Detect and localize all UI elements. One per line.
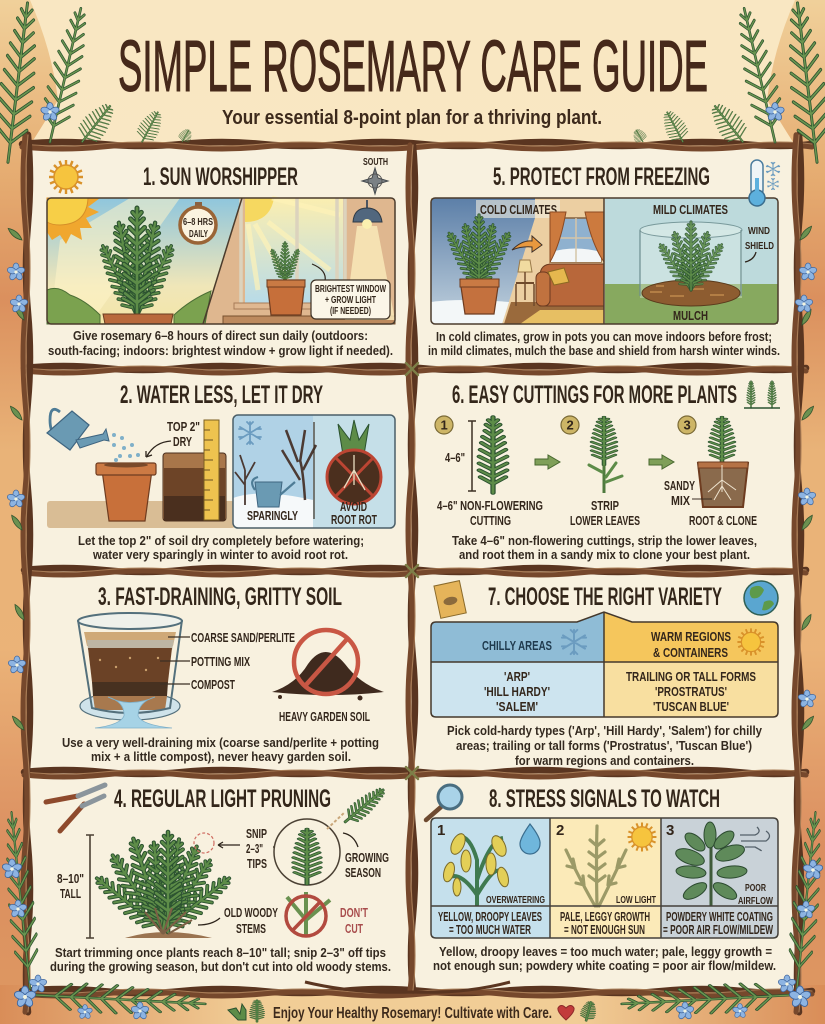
bush — [91, 832, 235, 938]
pot — [96, 462, 156, 521]
detail circle — [274, 784, 388, 885]
wind shield label: SHIELD — [745, 240, 774, 252]
snip label: TIPS — [247, 856, 267, 871]
signal captions: = NOT ENOUGH SUN — [564, 923, 645, 937]
mild label: MILD CLIMATES — [653, 202, 728, 217]
step 3: MIX — [671, 493, 690, 508]
growing season: GROWING — [345, 850, 389, 865]
wind shield label — [745, 225, 774, 262]
panel: 2 water less — [47, 381, 395, 562]
heading 2: 2. WATER LESS, LET IT DRY — [120, 381, 323, 409]
callout — [311, 264, 390, 319]
body 7: areas; trailing or tall forms ('Prostratus', 'Tuscan Blue') — [456, 738, 752, 753]
icon: herbs — [228, 1000, 264, 1022]
step 2: STRIP — [591, 498, 619, 513]
arrow — [535, 455, 560, 469]
signal table — [431, 818, 778, 938]
step 1 — [435, 416, 543, 528]
corner sprigs: bottom right — [622, 812, 825, 1020]
heading 1: 1. SUN WORSHIPPER — [143, 163, 298, 191]
wind shield label: WIND — [748, 225, 770, 237]
body 6: Take 4–6" non-flowering cuttings, strip the lower leaves, — [452, 533, 757, 548]
old woody label: STEMS — [236, 921, 266, 936]
signal captions: PALE, LEGGY GROWTH — [560, 910, 650, 924]
body 4 — [50, 945, 391, 974]
corner sprigs: bottom left — [0, 812, 205, 1020]
snip label: 2–3" — [246, 841, 263, 856]
mulch label: MULCH — [673, 308, 708, 323]
table surface — [47, 501, 235, 528]
dry label — [146, 419, 200, 457]
warm column: 'PROSTRATUS' — [655, 684, 727, 699]
no garden soil sign: HEAVY GARDEN SOIL — [279, 709, 370, 724]
body 6: and root them in a sandy mix to clone your best plant. — [459, 547, 750, 562]
root rot label — [331, 499, 377, 527]
signal 1 — [437, 822, 545, 906]
warm column: & CONTAINERS — [653, 645, 728, 660]
cold plant — [443, 215, 515, 314]
body 8: Yellow, droopy leaves = too much water; pale, leggy growth = — [439, 944, 772, 959]
layer labels — [160, 630, 295, 692]
icon: sun — [49, 160, 83, 194]
panel: 4 pruning — [46, 784, 391, 974]
panel: 8 stress signals — [426, 785, 778, 973]
signal captions: YELLOW, DROOPY LEAVES — [438, 910, 542, 924]
plant — [94, 208, 180, 320]
subtitle: Your essential 8-point plan for a thriving plant. — [222, 107, 602, 129]
panel: 5 protect from freezing — [428, 160, 780, 358]
body 3: mix + a little compost), never heavy garden soil. — [91, 749, 351, 764]
warm column — [626, 628, 765, 714]
chilly column: CHILLY AREAS — [482, 638, 552, 653]
body 1: Give rosemary 6–8 hours of direct sun daily (outdoors: — [73, 328, 368, 343]
signal 1: 1 — [437, 822, 445, 839]
height marker: TALL — [60, 886, 81, 901]
step 1: CUTTING — [470, 513, 511, 528]
chilly column: 'SALEM' — [496, 699, 538, 714]
heading 4: 4. REGULAR LIGHT PRUNING — [114, 785, 331, 813]
step 2 — [561, 416, 640, 528]
icon: globe — [744, 581, 778, 615]
illustration: climates — [431, 198, 778, 324]
step 3: 3 — [684, 418, 691, 432]
step 3 — [664, 416, 757, 528]
dry label: TOP 2" — [167, 419, 200, 434]
layer labels: POTTING MIX — [191, 654, 250, 669]
footer — [228, 1000, 598, 1023]
footer text: Enjoy Your Healthy Rosemary! Cultivate with Care. — [273, 1005, 552, 1022]
icon: compass: SOUTH — [363, 156, 388, 168]
signal 3: AIRFLOW — [738, 895, 773, 907]
step 3: SANDY — [664, 478, 695, 493]
body 1: south-facing; indoors: brightest window + grow light if needed). — [48, 343, 393, 358]
illustration: sun and window — [47, 198, 395, 324]
height marker: 8–10" — [57, 871, 84, 886]
snip label — [218, 826, 294, 871]
old woody label: OLD WOODY — [224, 905, 278, 920]
step 2: LOWER LEAVES — [570, 513, 640, 528]
step 3: ROOT & CLONE — [689, 513, 757, 528]
body 3: Use a very well-draining mix (coarse sand/perlite + potting — [62, 735, 379, 750]
panel: 3 soil — [62, 583, 384, 764]
signal 3 — [666, 822, 773, 907]
lamp — [345, 200, 395, 320]
warm column: TRAILING OR TALL FORMS — [626, 669, 756, 684]
step 1: 4–6" NON-FLOWERING — [437, 498, 543, 513]
water drops — [112, 433, 140, 462]
window — [223, 198, 395, 324]
stopwatch: 6–8 HRS — [183, 216, 213, 228]
growing season — [343, 833, 389, 880]
icon: sprigs — [744, 381, 780, 408]
stopwatch: DAILY — [189, 228, 208, 240]
body 7 — [447, 723, 763, 768]
icon: seed packet — [434, 581, 466, 618]
signal captions: = TOO MUCH WATER — [449, 923, 531, 937]
callout: (IF NEEDED) — [330, 305, 371, 317]
signal captions: = POOR AIR FLOW/MILDEW — [663, 923, 773, 937]
corner sprigs: top left — [0, 1, 194, 164]
window and sofa — [516, 212, 604, 306]
cold label: COLD CLIMATES — [480, 202, 557, 217]
panel: 1 sun worshipper — [47, 156, 395, 358]
sparingly label: SPARINGLY — [247, 508, 298, 523]
icon: heart — [558, 1006, 574, 1020]
mild climates — [605, 198, 778, 324]
chilly column — [482, 630, 586, 714]
layer labels: COMPOST — [191, 677, 235, 692]
step 2: 2 — [566, 418, 574, 432]
side leaves and flowers: left — [6, 227, 29, 732]
signal captions — [438, 910, 773, 937]
chilly column: 'HILL HARDY' — [484, 684, 550, 699]
icon: compass — [362, 156, 388, 194]
snip label: SNIP — [246, 826, 267, 841]
icon: pruners — [46, 785, 105, 831]
side leaves and flowers: right — [794, 225, 818, 732]
signal 2: 2 — [556, 822, 564, 839]
body 8: not enough sun; powdery white coating = poor air flow/mildew. — [433, 958, 776, 973]
old woody label — [198, 905, 278, 936]
chilly column: 'ARP' — [504, 669, 530, 684]
signal 2: LOW LIGHT — [616, 894, 656, 906]
body 8 — [433, 944, 776, 973]
body 6 — [452, 533, 757, 562]
icon: leaves — [580, 1000, 598, 1023]
heading 3: 3. FAST-DRAINING, GRITTY SOIL — [98, 583, 342, 611]
step 1: 1 — [440, 418, 448, 432]
signal 1: OVERWATERING — [486, 894, 545, 906]
height marker — [57, 835, 94, 938]
soil sample — [163, 420, 226, 521]
do not cut: DON'T — [340, 905, 368, 920]
layer labels: COARSE SAND/PERLITE — [191, 630, 295, 645]
body 4: Start trimming once plants reach 8–10" tall; snip 2–3" off tips — [55, 945, 386, 960]
arrow — [649, 455, 674, 469]
icon: thermometer — [749, 160, 780, 206]
panel: 7 variety — [431, 581, 778, 768]
warm column: WARM REGIONS — [651, 629, 731, 644]
panel backgrounds — [30, 148, 796, 990]
do not cut: CUT — [345, 921, 363, 936]
body 1 — [48, 328, 393, 358]
stopwatch — [180, 202, 216, 243]
body 7: for warm regions and containers. — [515, 753, 694, 768]
pot — [103, 314, 173, 324]
icon: magnifier — [426, 785, 462, 820]
dry label: DRY — [173, 434, 192, 449]
step 1: 4–6" — [445, 450, 465, 465]
root rot label: AVOID — [340, 499, 367, 514]
arrow indoors — [512, 236, 542, 252]
body 2: Let the top 2" of soil dry completely before watering; — [78, 533, 364, 548]
signal 2 — [556, 822, 656, 906]
variety table — [431, 612, 778, 717]
do not cut — [286, 892, 368, 936]
growing season: SEASON — [345, 865, 381, 880]
body 3 — [62, 735, 379, 764]
warm column: 'TUSCAN BLUE' — [653, 699, 729, 714]
body 2 — [78, 533, 364, 562]
potted plant — [267, 242, 305, 315]
body 5 — [428, 329, 780, 358]
body 7: Pick cold-hardy types ('Arp', 'Hill Hardy', 'Salem') for chilly — [447, 723, 763, 738]
body 4: during the growing season, but don't cut into old woody stems. — [50, 959, 391, 974]
corner sprigs: top right — [631, 1, 825, 164]
glass of soil layers — [78, 613, 182, 728]
icon: watering can — [47, 409, 109, 450]
callout: + GROW LIGHT — [325, 294, 376, 306]
signal 3: 3 — [666, 822, 674, 839]
root rot label: ROOT ROT — [331, 512, 377, 527]
signal 3: POOR — [745, 882, 766, 894]
no garden soil sign — [272, 630, 384, 724]
callout: BRIGHTEST WINDOW — [315, 283, 386, 295]
winter box — [233, 415, 395, 528]
body 2: water very sparingly in winter to avoid root rot. — [92, 547, 348, 562]
panel: 6 cuttings — [435, 381, 780, 562]
